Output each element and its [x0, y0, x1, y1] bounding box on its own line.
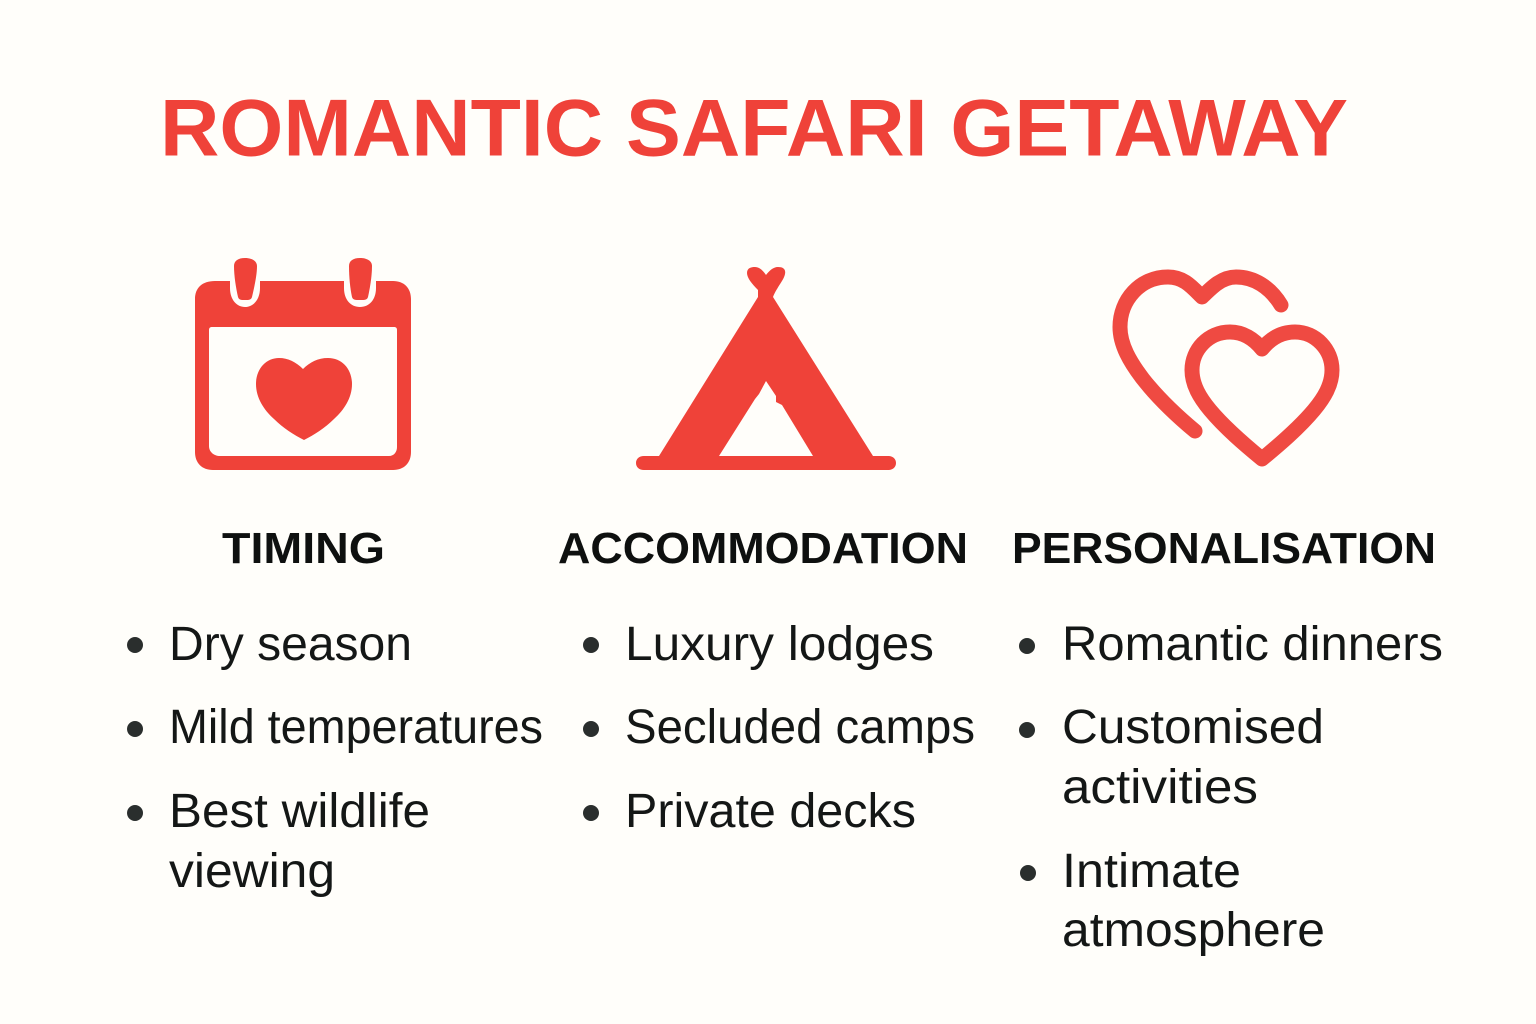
bullet item: customised activities — [1019, 701, 1324, 814]
bullet item: intimate atmosphere: atmosphere — [1062, 904, 1325, 957]
bullet item: dry season: Dry season — [169, 618, 412, 671]
list: accommodation — [583, 618, 975, 838]
panel: timing — [127, 258, 543, 898]
bullet item: intimate atmosphere — [1020, 845, 1325, 957]
bullet item: customised activities: activities — [1062, 761, 1258, 814]
icon: two hearts — [1120, 277, 1332, 459]
bullet item: mild temperatures: Mild temperatures — [169, 701, 543, 754]
bullet item: intimate atmosphere: Intimate — [1062, 845, 1241, 898]
panel: personalisation — [1012, 277, 1443, 957]
heading: timing: TIMING — [222, 524, 385, 573]
bullet item: best wildlife viewing — [127, 785, 430, 898]
panel: accommodation — [558, 267, 975, 838]
title: ROMANTIC SAFARI GETAWAY — [160, 84, 1348, 174]
bullet item: secluded camps: Secluded camps — [625, 701, 975, 754]
bullet item: private decks: Private decks — [625, 785, 916, 838]
icon: calendar with heart — [195, 258, 411, 470]
heading: personalisation: PERSONALISATION — [1012, 524, 1436, 573]
bullet item: customised activities: Customised — [1062, 701, 1324, 754]
heading: accommodation: ACCOMMODATION — [558, 524, 968, 573]
list: timing — [127, 618, 543, 898]
icon: tent — [636, 267, 896, 470]
bullet item: best wildlife viewing: Best wildlife — [169, 785, 430, 838]
list: personalisation — [1019, 618, 1443, 957]
bullet item: romantic dinners: Romantic dinners — [1062, 618, 1443, 671]
bullet item: luxury lodges: Luxury lodges — [625, 618, 934, 671]
bullet item: best wildlife viewing: viewing — [169, 845, 335, 898]
